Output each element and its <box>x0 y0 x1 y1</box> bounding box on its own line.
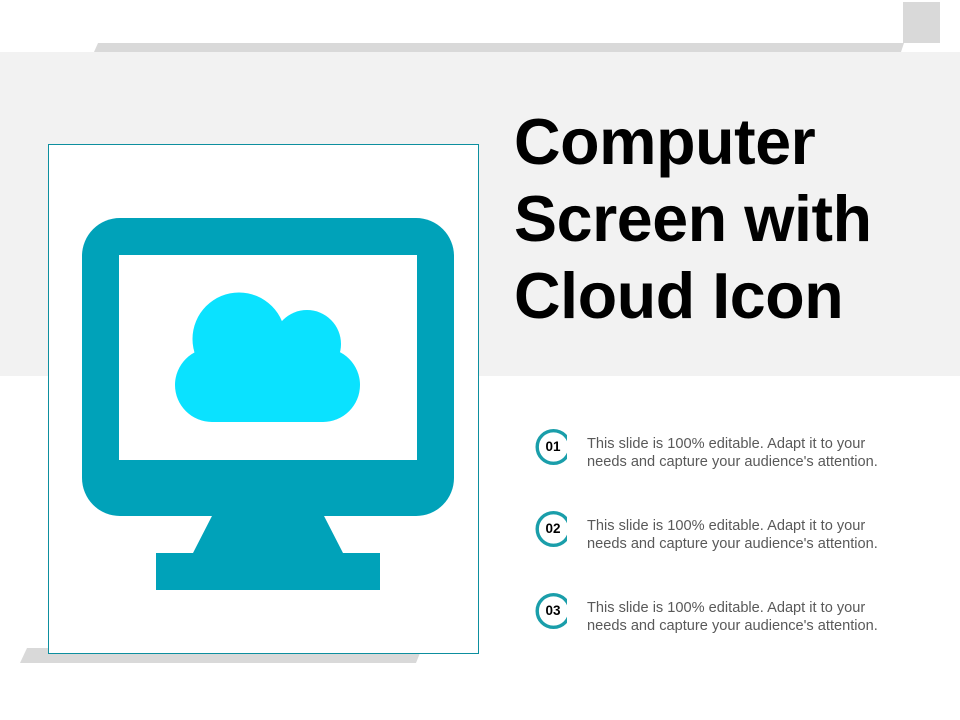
badge number 02: 02 <box>545 521 561 536</box>
item text 01: needs and capture your audience's attention. <box>587 454 878 470</box>
badge number 03: 03 <box>545 603 561 618</box>
monitor frame <box>82 218 454 516</box>
bottom left grey skewed bar <box>20 648 420 663</box>
cloud <box>175 292 360 422</box>
title: Computer <box>514 106 815 178</box>
title <box>514 106 872 332</box>
title: Screen with <box>514 183 872 255</box>
badge number 01: 01 <box>545 439 561 454</box>
badge ring 02 <box>536 511 567 547</box>
top grey skewed bar <box>94 43 904 52</box>
item text 03: This slide is 100% editable. Adapt it to your <box>587 600 865 616</box>
item text 02: needs and capture your audience's attention. <box>587 536 878 552</box>
list item 03 <box>536 593 878 634</box>
item text 02 <box>587 518 878 552</box>
icon: computer screen with cloud <box>82 218 454 590</box>
top right grey square <box>903 2 940 43</box>
item text 01 <box>587 436 878 470</box>
item text 03 <box>587 600 878 634</box>
badge ring 01 <box>536 429 567 465</box>
item text 01: This slide is 100% editable. Adapt it to your <box>587 436 865 452</box>
list item 02 <box>536 511 878 552</box>
item text 03: needs and capture your audience's attention. <box>587 618 878 634</box>
item text 02: This slide is 100% editable. Adapt it to your <box>587 518 865 534</box>
title: Cloud Icon <box>514 260 843 332</box>
badge ring 03 <box>536 593 567 629</box>
panel: computer icon <box>48 144 479 654</box>
list item 01 <box>536 429 878 470</box>
monitor screen <box>119 255 417 460</box>
light grey header band <box>0 52 960 376</box>
monitor stand <box>156 514 380 590</box>
